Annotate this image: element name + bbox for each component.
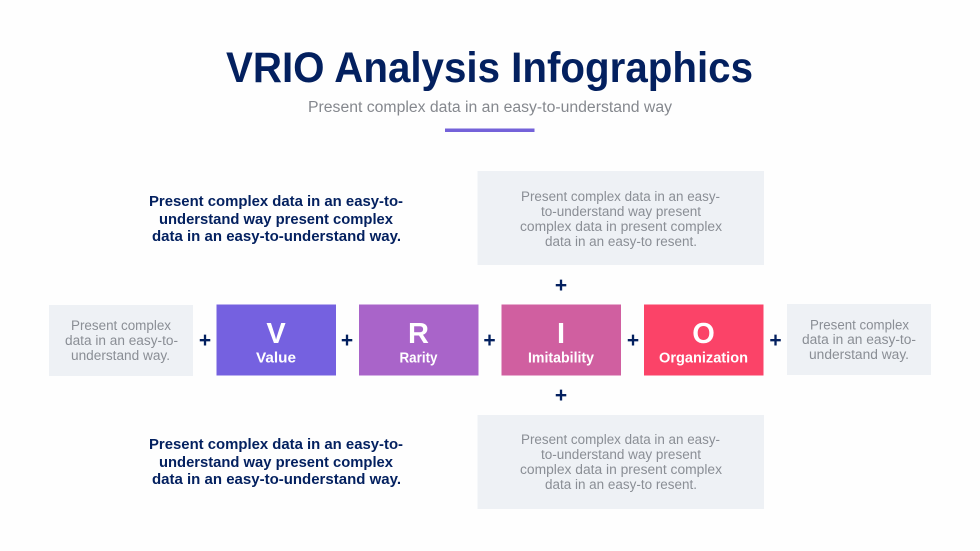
tile: Organization	[644, 304, 764, 376]
bold text block: bottom	[149, 437, 403, 488]
title: VRIO Analysis Infographics	[226, 44, 753, 92]
panel: top text box: Present complex data in an easy-	[521, 189, 720, 204]
tile: Value: V	[266, 318, 286, 350]
tile: Imitability: I	[557, 318, 565, 350]
tile: Imitability: Imitability	[528, 350, 594, 366]
bold text block: bottom: data in an easy-to-understand way.	[152, 472, 401, 488]
title underline	[445, 128, 534, 132]
panel: right text box: Present complex	[810, 318, 909, 332]
tile: Organization: O	[692, 318, 715, 350]
panel: left text box: Present complex	[71, 318, 171, 333]
plus: R to I: +	[483, 329, 496, 352]
tile: Rarity	[359, 304, 478, 376]
plus: V to R: +	[341, 329, 353, 352]
subtitle: Present complex data in an easy-to-understand way	[308, 99, 672, 116]
plus: above I: +	[555, 274, 567, 297]
tile: Value	[216, 304, 336, 376]
panel: bottom text box	[478, 415, 764, 509]
plus: left of V: +	[199, 329, 211, 352]
plus: I to O: +	[627, 329, 639, 352]
tile: Rarity: Rarity	[400, 350, 438, 366]
panel: left text box: understand way.	[71, 348, 170, 363]
bold text block: bottom: Present complex data in an easy-to-	[149, 437, 403, 453]
bold text block: top: Present complex data in an easy-to-	[149, 194, 403, 210]
panel: bottom text box: to-understand way present	[541, 447, 701, 462]
panel: right text box	[787, 304, 931, 375]
panel: right text box: understand way.	[809, 347, 909, 362]
panel: top text box	[478, 171, 764, 265]
panel: top text box: complex data in present complex	[520, 219, 722, 234]
panel: bottom text box: data in an easy-to resent.	[545, 477, 697, 492]
tile: Value: Value	[256, 350, 296, 366]
panel: top text box: to-understand way present	[541, 204, 701, 219]
bold text block: top: understand way present complex	[159, 212, 394, 228]
plus: right of O: +	[769, 329, 782, 352]
tile: Imitability	[502, 304, 621, 376]
panel: bottom text box: Present complex data in an easy-	[521, 432, 720, 447]
panel: right text box: data in an easy-to-	[802, 332, 916, 347]
panel: top text box: data in an easy-to resent.	[545, 234, 697, 249]
bold text block: top: data in an easy-to-understand way.	[152, 229, 401, 245]
plus: below I: +	[555, 384, 567, 407]
panel: left text box	[49, 305, 193, 376]
panel: left text box: data in an easy-to-	[65, 333, 178, 348]
bold text block: top	[149, 194, 403, 245]
tile: Organization: Organization	[659, 350, 748, 366]
bold text block: bottom: understand way present complex	[159, 455, 394, 471]
tile: Rarity: R	[408, 318, 429, 350]
panel: bottom text box: complex data in present complex	[520, 462, 722, 477]
